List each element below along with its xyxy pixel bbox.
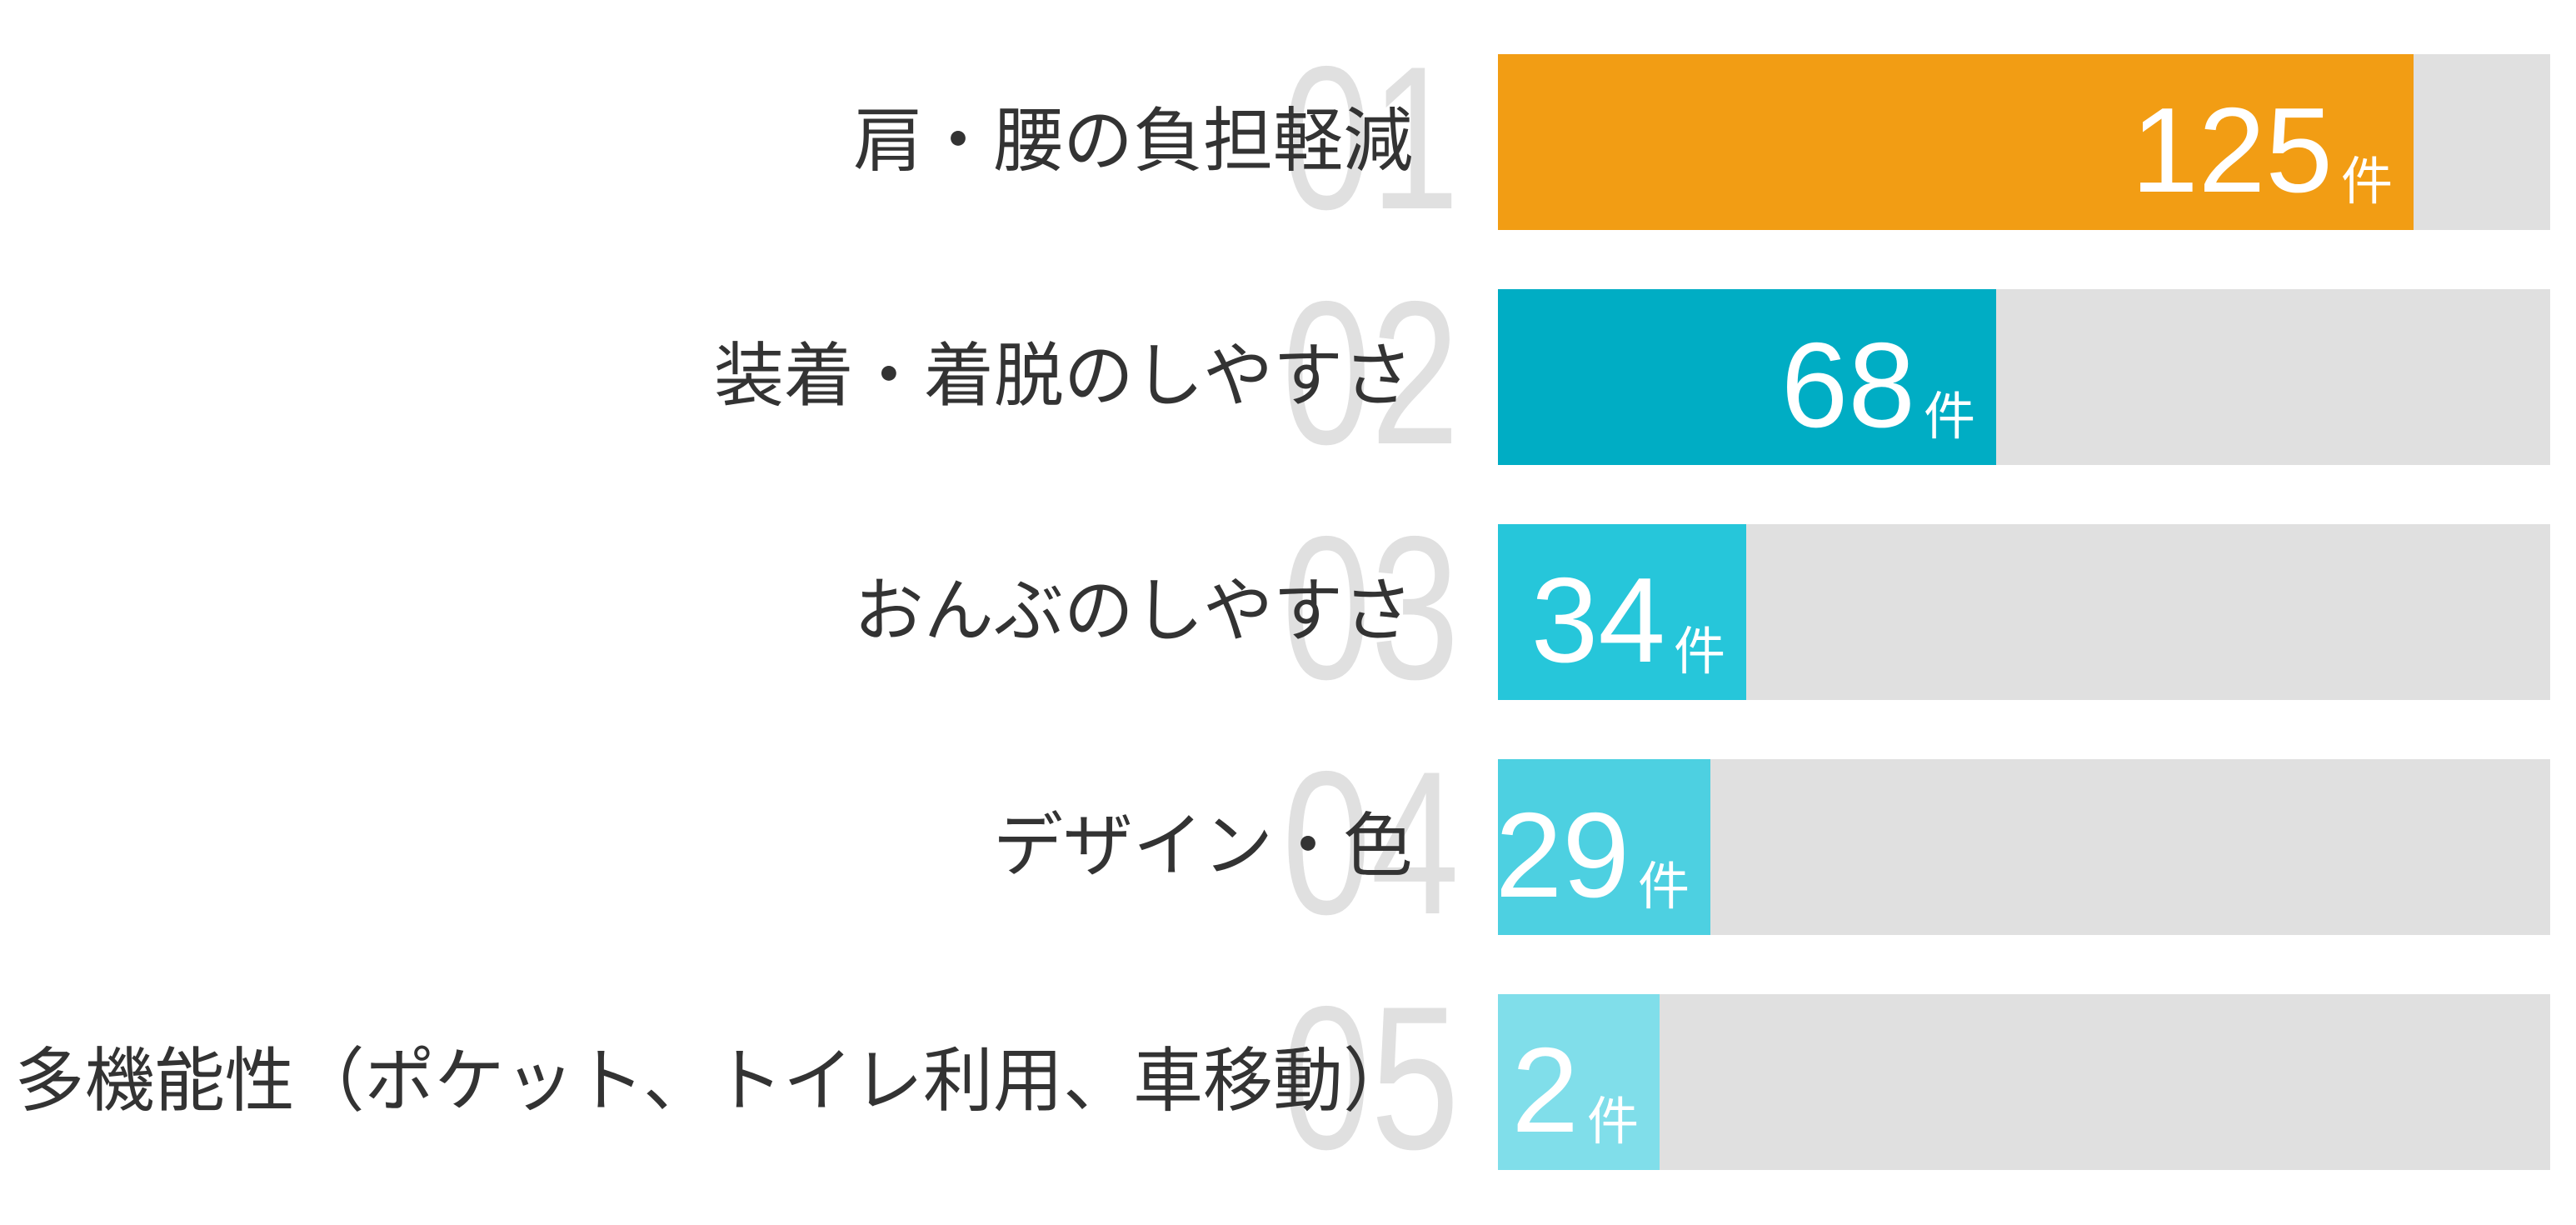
- bar 1: 125件: [2131, 82, 2393, 218]
- label 2: 装着・着脱のしやすさ: [714, 337, 1413, 415]
- bar 3: 34件: [1531, 552, 1725, 688]
- rank number 01: 01: [1282, 23, 1460, 252]
- rank number 02: 02: [1282, 258, 1460, 487]
- rank number 03: 03: [1282, 493, 1460, 722]
- bar 5: [1498, 994, 1660, 1170]
- bar 2: [1498, 289, 1996, 465]
- row 3: [854, 493, 2550, 722]
- bar 5: 2件: [1511, 1022, 1639, 1158]
- rank number 05: 05: [1282, 963, 1460, 1192]
- bar 1: [1498, 54, 2414, 230]
- label 4: デザイン・色: [993, 807, 1413, 885]
- label 5: 多機能性（ポケット、トイレ利用、車移動）: [15, 1042, 1413, 1120]
- track 5: [1498, 994, 2550, 1170]
- track 4: [1498, 759, 2550, 935]
- bar 4: 29件: [1495, 788, 1690, 922]
- rank number 04: 04: [1282, 728, 1460, 957]
- row 2: [714, 258, 2550, 487]
- bar 3: [1498, 524, 1746, 700]
- bar 4: [1498, 759, 1710, 935]
- track 2: [1498, 289, 2550, 465]
- label 1: 肩・腰の負担軽減: [853, 102, 1413, 180]
- track 1: [1498, 54, 2550, 230]
- track 3: [1498, 524, 2550, 700]
- label 3: おんぶのしやすさ: [854, 572, 1413, 650]
- row 5: [15, 963, 2550, 1192]
- bar 2: 68件: [1781, 318, 1975, 452]
- row 1: [853, 23, 2550, 252]
- row 4: [993, 728, 2550, 957]
